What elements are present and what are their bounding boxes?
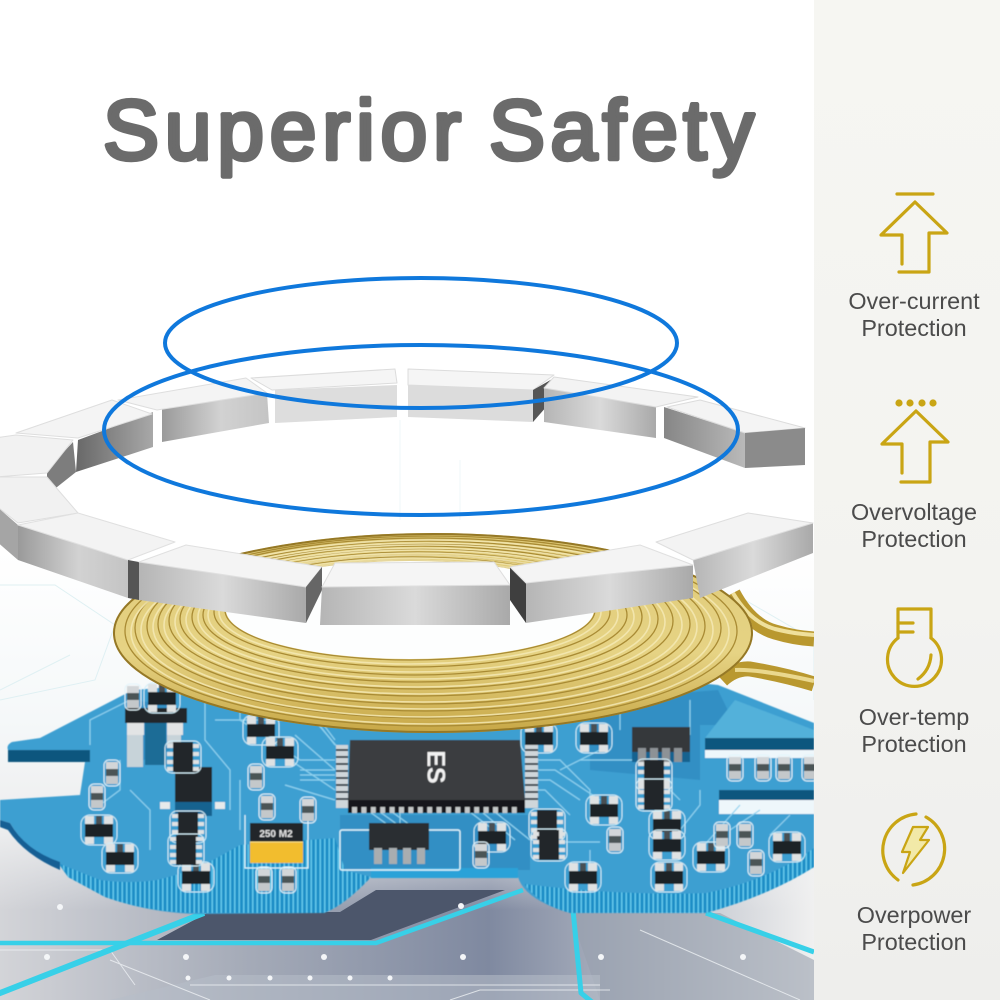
icon: arrow up with bar [881, 194, 947, 272]
back magnets [0, 369, 805, 560]
coil leads [722, 593, 814, 684]
blue wireless charging rings [104, 278, 738, 515]
board surface [0, 674, 814, 914]
hexagon background lines [0, 420, 814, 700]
label: Protection [861, 315, 967, 341]
label: Protection [861, 731, 967, 757]
small IC [369, 823, 429, 864]
feature: over-temp protection [859, 609, 969, 757]
chip logo: ES [421, 750, 449, 784]
front magnets [18, 513, 813, 625]
label: Over-current [848, 288, 980, 314]
gold wireless charging coil [113, 533, 814, 733]
label: Over-temp [859, 704, 969, 730]
cyan circuit lines [0, 890, 814, 1000]
coil center hole [226, 561, 594, 659]
floor panel [0, 820, 814, 1000]
board bevel [0, 820, 60, 870]
label: Protection [861, 526, 967, 552]
floor dots [44, 903, 746, 980]
title [103, 83, 754, 177]
feature: overvoltage protection [851, 401, 977, 552]
main chip [336, 740, 538, 813]
darker copper areas [130, 690, 814, 870]
title: Safety [489, 83, 754, 177]
feature: over-current protection [848, 194, 980, 341]
label: Protection [861, 929, 967, 955]
label: Overvoltage [851, 499, 977, 525]
yellow capacitor: 250 M2 [259, 829, 293, 840]
yellow capacitor [250, 823, 303, 863]
label: Overpower [857, 902, 971, 928]
icon: arrow up with dots [882, 401, 948, 482]
coil windings [114, 534, 752, 732]
side panel [814, 0, 1000, 1000]
components [81, 683, 818, 893]
feature: overpower protection [857, 814, 971, 955]
icon: lightning in circle [883, 814, 945, 885]
PCB traces [90, 690, 790, 885]
circuit board [0, 674, 818, 914]
board edge stripes [60, 838, 814, 913]
title: Superior [103, 83, 461, 177]
board slots [8, 738, 814, 814]
icon: bulb [887, 609, 942, 686]
magnet ring [0, 369, 813, 625]
